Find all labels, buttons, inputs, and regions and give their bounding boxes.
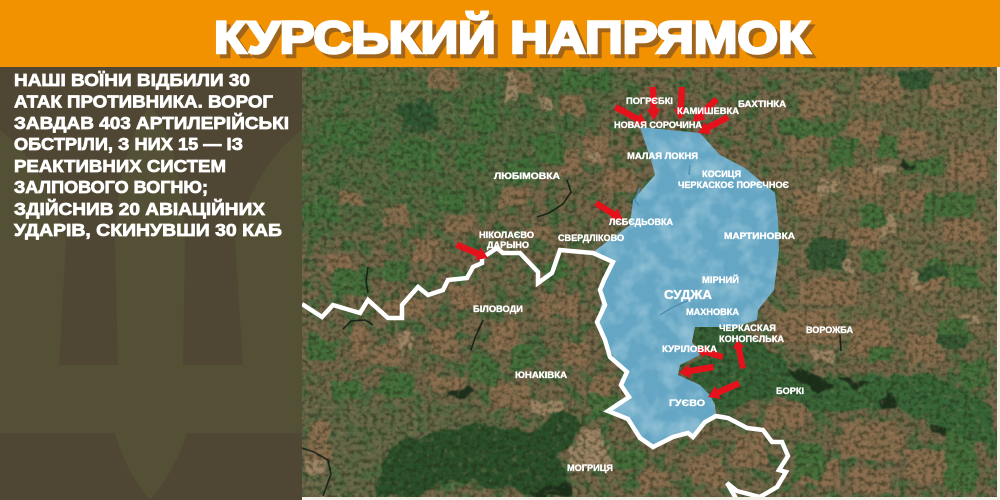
icon: trident watermark bbox=[0, 105, 302, 500]
label: ГУЄВО bbox=[669, 398, 705, 408]
arrow: Nikolaevo-Darino bbox=[454, 238, 491, 264]
label: СВЕРДЛІКОВО bbox=[558, 233, 624, 243]
label: КОСИЦЯ bbox=[702, 169, 741, 179]
map grain bbox=[302, 67, 1000, 500]
body text: УДАРІВ, СКИНУВШИ 30 КАБ bbox=[14, 220, 282, 240]
body text: РЕАКТИВНИХ СИСТЕМ bbox=[14, 156, 226, 176]
label: ЮНАКІВКА bbox=[515, 370, 567, 380]
red attack arrows bbox=[454, 87, 749, 403]
title shadow: КУРСЬКИЙ НАПРЯМОК bbox=[218, 16, 815, 67]
label: Sudzha: СУДЖА bbox=[664, 287, 713, 302]
label: МАРТИНОВКА bbox=[724, 231, 795, 241]
arrow: north-west of Nova Sorochyna bbox=[612, 101, 650, 130]
arrow: Kurilovka bbox=[693, 343, 725, 363]
east forest band bbox=[775, 362, 998, 445]
map light grain bbox=[302, 67, 1000, 500]
arrow: Cherkaskaya Konopelka bbox=[731, 339, 749, 370]
label: КУРІЛОВКА bbox=[662, 344, 717, 354]
forest near Suzha bbox=[680, 323, 800, 415]
body text: АТАК ПРОТИВНИКА. ВОРОГ bbox=[14, 92, 273, 112]
body text: НАШІ ВОЇНИ ВІДБИЛИ 30 bbox=[14, 70, 250, 90]
title: КУРСЬКИЙ НАПРЯМОК bbox=[214, 12, 811, 63]
body text bbox=[14, 70, 289, 240]
label: НІКОЛАЄВО bbox=[479, 230, 534, 240]
body text: ЗАЛПОВОГО ВОГНЮ; bbox=[14, 177, 208, 197]
occupied area: blue region bbox=[593, 127, 779, 447]
label: БОРКІ bbox=[776, 386, 804, 396]
arrow: Lebedovka bbox=[592, 197, 627, 226]
blue region texture bbox=[593, 127, 779, 447]
label: БІЛОВОДИ bbox=[473, 304, 523, 314]
arrow: Bakhtinka bbox=[695, 111, 731, 139]
arrow: Kamyshevka east bbox=[688, 94, 722, 127]
arrow: Guevo bbox=[705, 377, 742, 403]
white border line bbox=[302, 248, 788, 500]
label: ПОГРЄБКІ bbox=[626, 96, 673, 106]
arrow: Pogrebki bbox=[646, 87, 661, 120]
label: МАЛАЯ ЛОКНЯ bbox=[627, 151, 698, 161]
panel: left text panel bbox=[0, 67, 302, 500]
arrow: Kamyshevka bbox=[673, 87, 689, 120]
body text: ЗАВДАВ 403 АРТИЛЕРІЙСЬКІ bbox=[14, 112, 289, 133]
header bar bbox=[0, 0, 1000, 67]
river inside blue region bbox=[635, 165, 690, 315]
label: КАМИШЕВКА bbox=[677, 106, 739, 116]
label: МОГРИЦЯ bbox=[567, 463, 613, 473]
label: ДАРЬІНО bbox=[487, 240, 529, 250]
label: МАХНОВКА bbox=[686, 307, 739, 317]
rivers bbox=[302, 180, 841, 496]
map labels bbox=[473, 96, 853, 473]
map edge strips bbox=[302, 67, 1000, 500]
label: ЛЮБІМОВКА bbox=[494, 171, 560, 181]
label: ЛЄБЄДЬОВКА bbox=[609, 217, 673, 227]
arrow: west of Kurilovka bbox=[678, 360, 715, 380]
label: МІРНИЙ bbox=[702, 274, 739, 285]
label: БАХТІНКА bbox=[738, 99, 786, 109]
dark woods bbox=[445, 160, 945, 497]
satellite map background bbox=[302, 67, 1000, 500]
body text: ОБСТРІЛИ, З НИХ 15 — ІЗ bbox=[14, 134, 243, 154]
label: КОНОПЄЛЬКА bbox=[719, 334, 784, 344]
label: ЧЕРКАСКОЄ ПОРЄЧНОЄ bbox=[678, 180, 789, 190]
body text: ЗДІЙСНИВ 20 АВІАЦІЙНИХ bbox=[14, 198, 265, 219]
label: ВОРОЖБА bbox=[806, 325, 853, 335]
label: ЧЕРКАСКАЯ bbox=[719, 323, 776, 333]
south forest bbox=[375, 408, 582, 497]
label: НОВАЯ СОРОЧИНА bbox=[614, 120, 702, 130]
